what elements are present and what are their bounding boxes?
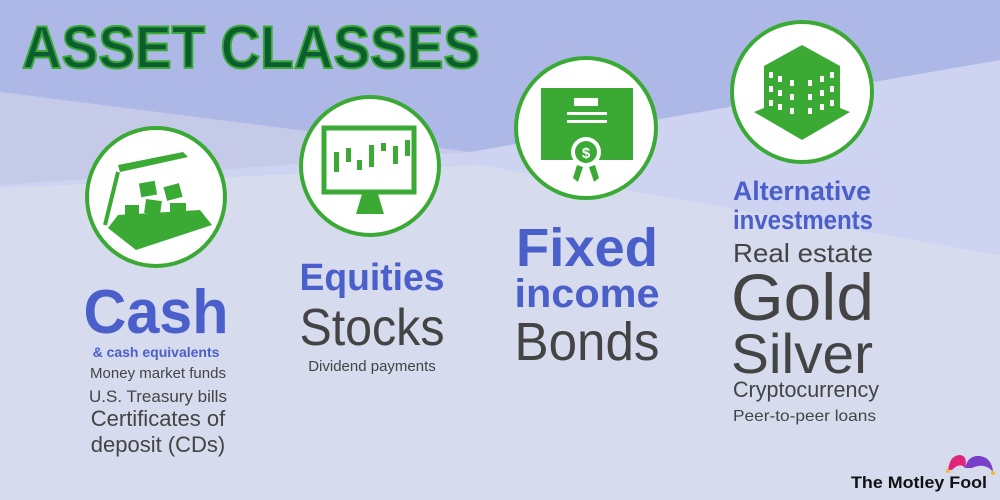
list: cash [89, 365, 227, 457]
heading: Cash: Cash [84, 278, 228, 347]
heading: Fixed income: Fixed [516, 218, 658, 278]
logo: The Motley Fool [851, 455, 995, 492]
heading: Equities: Equities [300, 257, 444, 299]
list: alternative: Silver [731, 322, 873, 385]
panel: fixed income: income [514, 272, 660, 316]
list: alternative [731, 238, 879, 425]
list: cash: Money market funds [90, 365, 226, 382]
list: equities: Dividend payments [308, 358, 436, 375]
list: alternative: Gold [731, 260, 874, 334]
list: cash: deposit (CDs) [91, 432, 225, 457]
title: ASSET CLASSES [22, 14, 480, 81]
list: equities: Stocks [300, 299, 444, 357]
panel: alternative investments [731, 22, 879, 425]
panel: alternative investments: investments [733, 205, 873, 235]
subheading: & cash equivalents [93, 344, 220, 360]
icon: certificate [516, 58, 656, 198]
list: fixed income: Bonds [514, 312, 660, 372]
icon: building [732, 22, 872, 162]
icon: monitor with chart [301, 97, 439, 235]
panel: cash [84, 128, 228, 457]
icon: briefcase of cash [87, 128, 225, 266]
icon: certificate: $ [582, 145, 591, 162]
list: cash: U.S. Treasury bills [89, 387, 227, 406]
list: alternative: Peer-to-peer loans [733, 408, 876, 425]
panel: equities [300, 97, 444, 375]
panel: fixed income [514, 58, 660, 372]
list: alternative: Cryptocurrency [733, 377, 879, 402]
logo: The Motley Fool: The Motley Fool [851, 473, 987, 492]
list: cash: Certificates of [91, 406, 226, 431]
list: alternative: Real estate [733, 238, 873, 268]
heading: Alternative investments: Alternative [733, 176, 871, 206]
